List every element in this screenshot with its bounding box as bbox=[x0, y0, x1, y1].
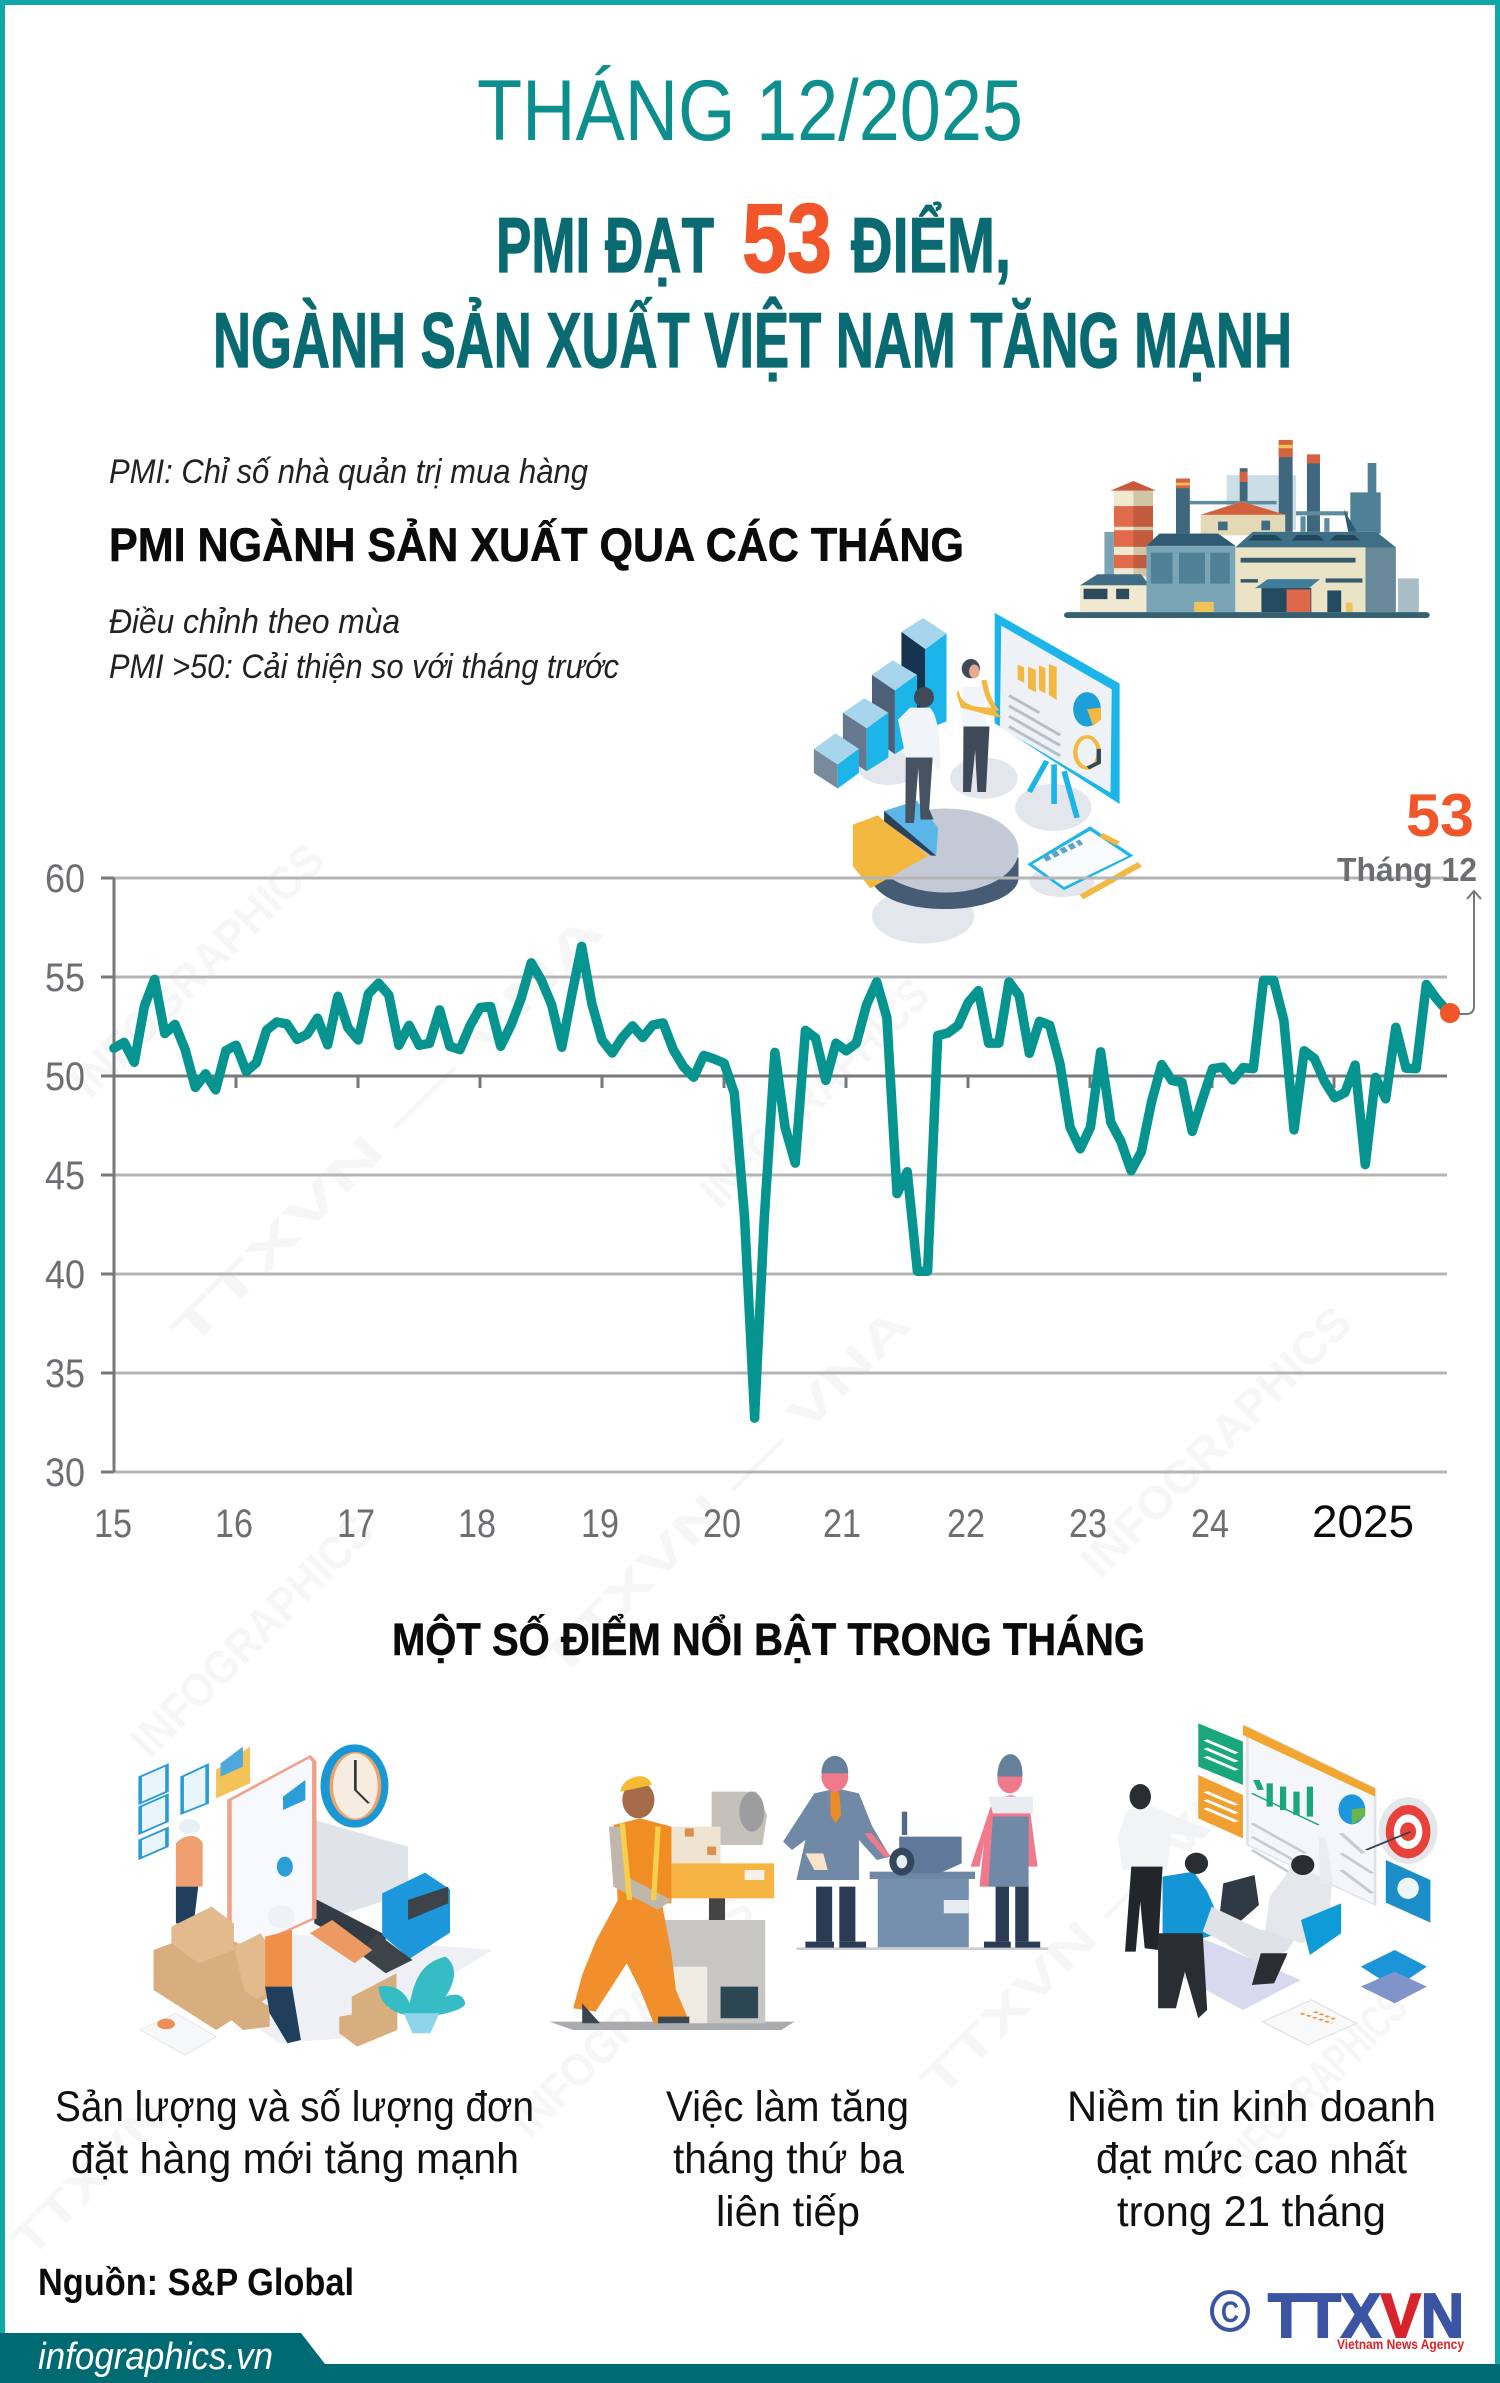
headline line 1: PMI ĐẠT bbox=[496, 201, 714, 289]
takeaway 2 bbox=[666, 2083, 909, 2236]
watermarks: INFOGRAPHICS bbox=[1210, 1981, 1417, 2187]
clipboard and pencil bbox=[1027, 826, 1140, 897]
illustration: factory worker with machine bbox=[549, 1776, 795, 2030]
callout value: 53 bbox=[1406, 782, 1474, 849]
footer band bbox=[0, 2333, 1500, 2383]
x axis labels: 15 bbox=[94, 1502, 132, 1546]
takeaway 2: Việc làm tăng bbox=[666, 2083, 909, 2131]
takeaway 3: Niềm tin kinh doanh bbox=[1067, 2083, 1436, 2131]
logo: TTXVN bbox=[1212, 2282, 1464, 2352]
chart heading: PMI NGÀNH SẢN XUẤT QUA CÁC THÁNG bbox=[109, 518, 964, 571]
pie chart disc bbox=[853, 801, 1019, 909]
y axis labels: 60 bbox=[45, 857, 85, 901]
watermarks: INFOGRAPHICS bbox=[690, 968, 939, 1217]
copyright mark bbox=[1212, 2292, 1248, 2330]
person on pie bbox=[898, 687, 940, 823]
x axis labels: 16 bbox=[215, 1502, 253, 1546]
headline line 1 bbox=[496, 183, 1011, 293]
callout arrow bbox=[1450, 891, 1481, 1014]
chart notes: PMI >50: Cải thiện so với tháng trước bbox=[109, 648, 619, 686]
latest point marker bbox=[1440, 1003, 1460, 1023]
illustration: two workers and machine bbox=[783, 1754, 1048, 1950]
wordmark: TTXVN bbox=[1268, 2282, 1464, 2351]
callout value bbox=[1337, 782, 1477, 888]
y axis labels: 55 bbox=[45, 956, 85, 1000]
data line bbox=[114, 946, 1450, 1418]
copyright mark: C bbox=[1221, 2296, 1239, 2329]
source: Nguồn: S&P Global bbox=[38, 2262, 354, 2304]
watermarks: TTXVN — VNA bbox=[160, 903, 614, 1357]
y axis labels: 35 bbox=[45, 1352, 85, 1396]
y axis labels: 30 bbox=[45, 1451, 85, 1495]
x axis labels: 24 bbox=[1191, 1502, 1229, 1546]
takeaway 2: liên tiếp bbox=[716, 2188, 860, 2236]
x axis labels bbox=[94, 1496, 1414, 1547]
icon: analysts with charts bbox=[814, 613, 1140, 943]
PMI definition: PMI: Chỉ số nhà quản trị mua hàng bbox=[109, 453, 588, 491]
y axis labels: 40 bbox=[45, 1253, 85, 1297]
takeaway 2: tháng thứ ba bbox=[673, 2135, 904, 2183]
takeaway 1: đặt hàng mới tăng mạnh bbox=[71, 2135, 519, 2183]
x axis labels: 23 bbox=[1069, 1502, 1107, 1546]
takeaway 3: đạt mức cao nhất bbox=[1096, 2135, 1407, 2183]
takeaways bbox=[55, 2083, 1436, 2236]
x axis labels: 18 bbox=[458, 1502, 496, 1546]
headline line 1: ĐIỂM, bbox=[851, 201, 1011, 289]
isometric bars bbox=[814, 618, 947, 789]
callout value: Tháng 12 bbox=[1337, 851, 1477, 888]
headline bbox=[213, 183, 1292, 384]
watermarks: TTXVN — VNA bbox=[530, 1297, 921, 1687]
grid lines bbox=[114, 878, 1447, 1472]
illustrations row bbox=[140, 1723, 1438, 2055]
takeaway 3: trong 21 tháng bbox=[1117, 2188, 1386, 2236]
takeaway 3 bbox=[1067, 2083, 1436, 2236]
x axis labels: 19 bbox=[581, 1502, 619, 1546]
line chart: PMI bbox=[45, 782, 1481, 1547]
takeaway 1: Sản lượng và số lượng đơn bbox=[55, 2083, 534, 2131]
x axis labels: 2025 bbox=[1312, 1496, 1414, 1547]
person at board bbox=[957, 659, 1002, 792]
floor shadows bbox=[858, 751, 1094, 943]
watermarks bbox=[0, 833, 1417, 2267]
watermarks: TTXVN — VNA bbox=[910, 1731, 1286, 2107]
watermarks: TTXVN bbox=[0, 2089, 178, 2267]
y axis labels: 50 bbox=[45, 1055, 85, 1099]
watermarks: INFOGRAPHICS bbox=[60, 833, 335, 1107]
x axis labels: 17 bbox=[337, 1502, 375, 1546]
axes and ticks bbox=[101, 878, 1334, 1472]
chart notes bbox=[109, 603, 619, 686]
watermarks: INFOGRAPHICS bbox=[120, 1504, 383, 1767]
illustration: logistics bbox=[140, 1744, 493, 2055]
icon: factory bbox=[1064, 440, 1430, 618]
x axis labels: 20 bbox=[703, 1502, 741, 1546]
section heading: MỘT SỐ ĐIỂM NỔI BẬT TRONG THÁNG bbox=[392, 1614, 1145, 1665]
takeaway 1 bbox=[55, 2083, 534, 2183]
x axis labels: 22 bbox=[947, 1502, 985, 1546]
agency name: Vietnam News Agency bbox=[1337, 2336, 1464, 2352]
illustration: business team bbox=[1118, 1723, 1438, 2045]
title: month: THÁNG 12/2025 bbox=[477, 63, 1023, 159]
watermarks: INFOGRAPHICS bbox=[500, 1884, 763, 2147]
headline line 1: 53 bbox=[742, 183, 832, 293]
site name: infographics.vn bbox=[38, 2336, 273, 2378]
x axis labels: 21 bbox=[823, 1502, 861, 1546]
y axis labels bbox=[45, 857, 85, 1495]
presentation board bbox=[995, 613, 1120, 818]
y axis labels: 45 bbox=[45, 1154, 85, 1198]
chart notes: Điều chỉnh theo mùa bbox=[109, 603, 400, 641]
watermarks: INFOGRAPHICS bbox=[1070, 1296, 1362, 1587]
